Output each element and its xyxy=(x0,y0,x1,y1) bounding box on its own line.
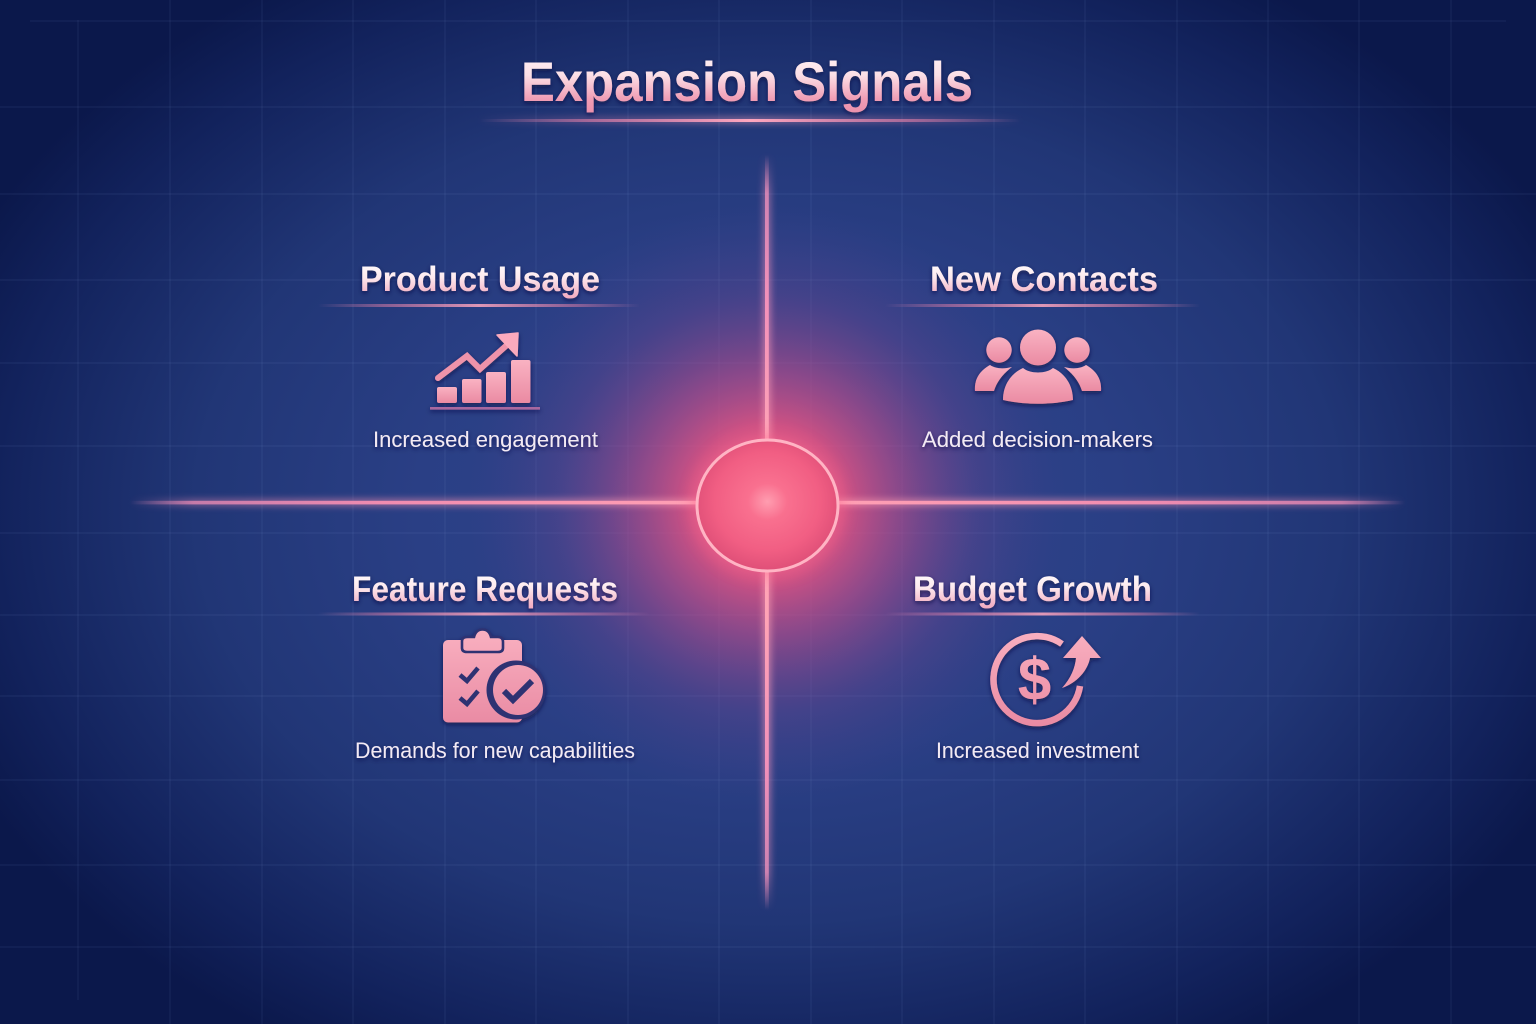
title underline xyxy=(475,117,1025,123)
icon: clipboard with check xyxy=(443,630,546,722)
heading: new contacts: New Contacts xyxy=(930,260,1158,299)
icon: growth chart xyxy=(430,333,540,410)
heading: budget growth: Budget Growth xyxy=(913,570,1152,609)
panel: new contacts xyxy=(885,260,1200,452)
horizontal axis line xyxy=(130,499,1405,506)
heading rule xyxy=(318,304,640,307)
description: budget growth: Increased investment xyxy=(936,738,1139,763)
heading: product usage: Product Usage xyxy=(360,260,600,299)
heading: feature requests: Feature Requests xyxy=(352,570,618,609)
center orb xyxy=(694,436,842,574)
description: new contacts: Added decision-makers xyxy=(922,427,1153,452)
heading rule xyxy=(885,304,1200,307)
panel: product usage xyxy=(318,260,640,452)
vertical axis line xyxy=(763,155,771,910)
heading rule xyxy=(318,612,650,616)
icon: dollar with arrow: $ xyxy=(1018,646,1051,713)
title: Expansion Signals xyxy=(521,50,973,113)
description: product usage: Increased engagement xyxy=(373,427,598,452)
icon: people xyxy=(975,330,1101,404)
panel: budget growth xyxy=(885,570,1200,763)
heading rule xyxy=(885,612,1200,616)
panel: feature requests xyxy=(318,570,650,763)
description: feature requests: Demands for new capabilities xyxy=(355,738,635,763)
icon: dollar with arrow xyxy=(993,636,1101,723)
center glow xyxy=(460,200,1074,806)
